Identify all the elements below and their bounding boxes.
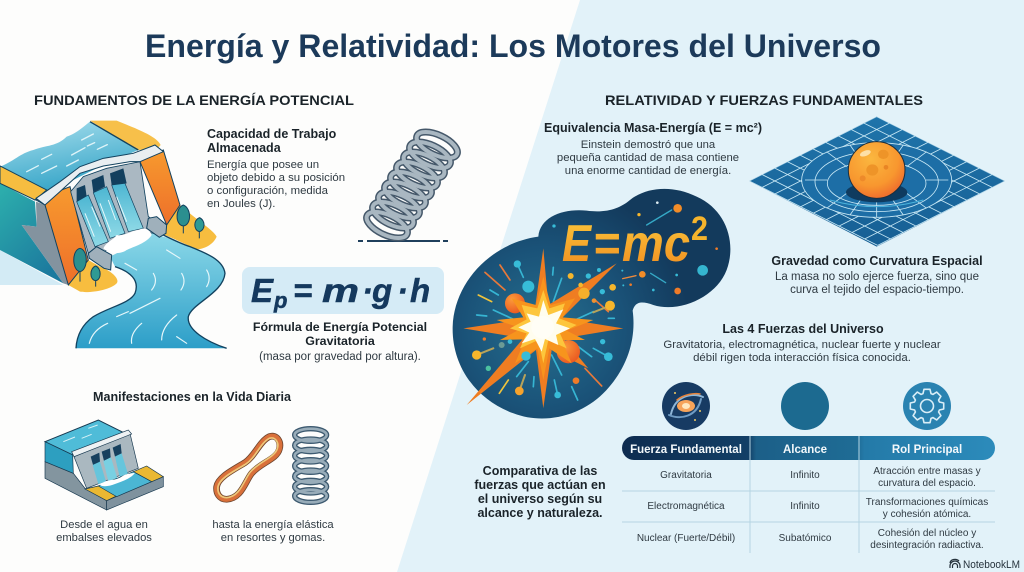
- text block: mass-energy equivalence: pequeña cantidad de masa contiene: [557, 152, 739, 164]
- formula box: =: [293, 272, 312, 309]
- caption: reservoirs: [56, 519, 152, 544]
- formula box: h: [410, 272, 430, 309]
- text block: stored work capacity: Energía que posee un: [207, 159, 319, 171]
- icon: tilted spring: [358, 127, 461, 243]
- icon: rubber band: [217, 436, 280, 499]
- text block: stored work capacity: [207, 127, 345, 210]
- table row: gravitational: curvatura del espacio.: [878, 478, 976, 489]
- table header: [630, 444, 962, 456]
- text block: mass-energy equivalence: Einstein demostró que una: [581, 139, 716, 151]
- table row: electromagnetic: Infinito: [790, 501, 820, 512]
- background: right panel: [397, 0, 1024, 572]
- heading: daily life: Manifestaciones en la Vida Diaria: [93, 390, 292, 404]
- table header: Rol Principal: [892, 444, 962, 456]
- illustration: spacetime grid with sphere: [749, 117, 1005, 247]
- text block: four forces: débil rigen toda interacción física conocida.: [693, 352, 911, 364]
- text block: mass-energy equivalence: Equivalencia Masa-Energía (E = mc²): [544, 121, 762, 135]
- table row: gravitational: Gravitatoria: [660, 470, 712, 481]
- text block: stored work capacity: objeto debido a su posición: [207, 172, 345, 184]
- icon: small spring: [295, 429, 327, 502]
- icon: galaxy: [662, 382, 710, 430]
- table: fundamental forces: [622, 436, 995, 553]
- table row: electromagnetic: Transformaciones químicas: [866, 497, 988, 508]
- text block: four forces: Gravitatoria, electromagnética, nuclear fuerte y nuclear: [663, 339, 941, 351]
- text block: stored work capacity: Capacidad de Trabajo: [207, 127, 337, 141]
- illustration: dam and river: [0, 121, 227, 348]
- caption: springs and rubber bands: hasta la energía elástica: [212, 519, 334, 531]
- formula caption: Fórmula de Energía Potencial: [253, 320, 427, 334]
- formula box: g: [371, 272, 392, 309]
- illustration: E=mc2 explosion: mc: [622, 215, 690, 273]
- text block: stored work capacity: en Joules (J).: [207, 198, 275, 210]
- caption: springs and rubber bands: [212, 519, 334, 544]
- table row: electromagnetic: y cohesión atómica.: [883, 509, 971, 520]
- caption: springs and rubber bands: en resortes y gomas.: [221, 532, 325, 544]
- formula box: p: [273, 288, 287, 313]
- heading: left section: FUNDAMENTOS DE LA ENERGÍA POTENCIAL: [34, 92, 354, 108]
- illustration: E=mc2 explosion: =: [593, 215, 620, 273]
- table row: nuclear: Subatómico: [779, 533, 832, 544]
- title: Energía y Relatividad: Los Motores del Universo: [145, 28, 881, 64]
- formula box: E: [251, 272, 274, 309]
- formula box: ·: [397, 272, 408, 309]
- caption: table description: [474, 464, 606, 520]
- icon: gear: [903, 382, 951, 430]
- text block: gravity as curvature: La masa no solo ejerce fuerza, sino que: [775, 271, 979, 283]
- table row: nuclear: [637, 528, 984, 551]
- text block: gravity as curvature: Gravedad como Curvatura Espacial: [771, 254, 983, 268]
- text block: gravity as curvature: curva el tejido del espacio-tiempo.: [790, 284, 964, 296]
- caption: table description: Comparativa de las: [483, 464, 597, 478]
- table row: gravitational: Infinito: [790, 470, 820, 481]
- formula box: [242, 267, 444, 314]
- caption: table description: fuerzas que actúan en: [474, 478, 606, 492]
- icon: blank range circle: [781, 382, 829, 430]
- table header: Fuerza Fundamental: [630, 444, 742, 456]
- text block: mass-energy equivalence: [544, 121, 762, 177]
- illustration: E=mc2 explosion: E: [562, 215, 592, 273]
- table row: gravitational: [660, 466, 981, 489]
- illustration: E=mc2 explosion: [453, 189, 730, 419]
- table row: gravitational: Atracción entre masas y: [873, 466, 981, 477]
- text block: gravity as curvature: [771, 254, 983, 296]
- table row: electromagnetic: Electromagnética: [647, 501, 725, 512]
- text block: mass-energy equivalence: una enorme cantidad de energía.: [565, 165, 731, 177]
- formula caption: Gravitatoria: [305, 334, 375, 348]
- caption: reservoirs: Desde el agua en: [60, 519, 148, 531]
- caption: table description: alcance y naturaleza.: [477, 506, 603, 520]
- caption: table description: el universo según su: [478, 492, 602, 506]
- table header: Alcance: [783, 444, 827, 456]
- formula box: m: [322, 272, 359, 309]
- formula caption: (masa por gravedad por altura).: [259, 351, 421, 363]
- table row: nuclear: Cohesión del núcleo y: [878, 528, 976, 539]
- text block: stored work capacity: o configuración, medida: [207, 185, 329, 197]
- caption: reservoirs: embalses elevados: [56, 532, 152, 544]
- logo: NotebookLM: NotebookLM: [963, 559, 1020, 571]
- table row: electromagnetic: [647, 497, 988, 520]
- text block: four forces: Las 4 Fuerzas del Universo: [722, 322, 884, 336]
- table row: nuclear: Nuclear (Fuerte/Débil): [637, 533, 735, 544]
- text block: four forces: [663, 322, 941, 364]
- illustration: E=mc2 explosion: 2: [691, 210, 708, 248]
- icon: small dam: [45, 420, 163, 510]
- text block: stored work capacity: Almacenada: [207, 141, 282, 155]
- formula box: ·: [362, 272, 373, 309]
- table row: nuclear: desintegración radiactiva.: [870, 540, 984, 551]
- formula caption: [253, 320, 427, 363]
- heading: right section: RELATIVIDAD Y FUERZAS FUNDAMENTALES: [605, 92, 923, 108]
